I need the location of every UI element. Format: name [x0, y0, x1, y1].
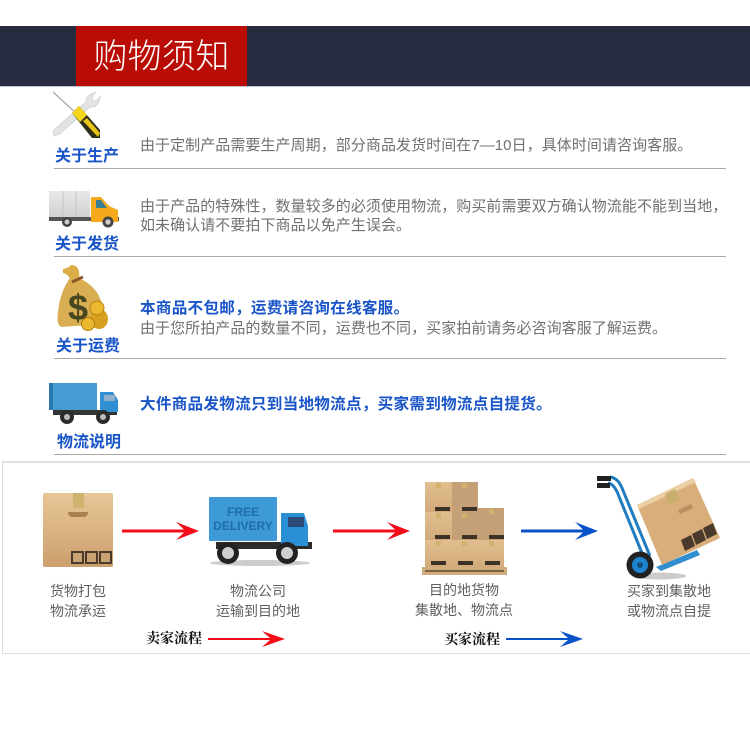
icon: blue truck: [49, 383, 118, 424]
icon: money bag: $: [68, 287, 88, 328]
text: freight note: 由于您所拍产品的数量不同，运费也不同，买家拍前请务必咨询客服了解运费。: [140, 320, 667, 337]
icon: free delivery truck: [209, 497, 312, 566]
label: 物流说明: 物流说明: [57, 434, 121, 451]
panel: logistics flow: [2, 461, 750, 654]
text: shipping: 由于产品的特殊性，数量较多的必须使用物流，购买前需要双方确认物流能不能到当地，: [140, 198, 727, 215]
arrow: red 1: [122, 522, 199, 540]
text: logistics notice: 大件商品发物流只到当地物流点，买家需到物流点自提货。: [140, 396, 552, 413]
text: freight bold: 本商品不包邮，运费请咨询在线客服。: [140, 300, 409, 317]
caption: destination: 集散地、物流点: [415, 602, 513, 618]
caption: logistics company: [216, 583, 300, 619]
caption: packing: [50, 583, 106, 619]
caption: logistics company: 物流公司: [230, 583, 286, 599]
arrow: seller legend: [208, 631, 285, 647]
label: 关于生产: 关于生产: [55, 148, 119, 165]
arrow: red 2: [333, 522, 410, 540]
caption: destination: [415, 582, 513, 618]
label: 关于发货: 关于发货: [55, 236, 119, 253]
icon: free delivery truck: DELIVERY: [213, 519, 273, 533]
label: 关于运费: 关于运费: [56, 338, 120, 355]
title: red tab: 购物须知: [94, 38, 230, 76]
caption: packing: 物流承运: [50, 603, 106, 619]
arrow: blue 1: [521, 522, 598, 540]
header bar: [0, 26, 750, 87]
icon: money bag: [58, 265, 108, 331]
caption: packing: 货物打包: [50, 583, 106, 599]
caption: logistics company: 运输到目的地: [216, 603, 300, 619]
legend: seller flow: 卖家流程: [146, 632, 202, 647]
title: red tab: [76, 26, 247, 86]
icon: hand truck with box: [597, 476, 720, 580]
text: production: 由于定制产品需要生产周期，部分商品发货时间在7—10日，具体时间请咨询客服。: [140, 137, 692, 154]
icon: cardboard box: [43, 493, 113, 567]
caption: buyer pickup: [627, 583, 711, 619]
icon: orange truck: [49, 191, 119, 228]
caption: destination: 目的地货物: [429, 582, 499, 598]
legend: buyer flow: 买家流程: [444, 633, 500, 648]
icon: tools: [52, 92, 100, 138]
caption: buyer pickup: 或物流点自提: [627, 603, 711, 619]
text: shipping line 2: 如未确认请不要拍下商品以免产生误会。: [140, 217, 411, 234]
icon: pallet of boxes: [422, 482, 507, 575]
icon: free delivery truck: FREE: [227, 505, 259, 519]
caption: buyer pickup: 买家到集散地: [627, 583, 711, 599]
arrow: buyer legend: [506, 631, 583, 647]
